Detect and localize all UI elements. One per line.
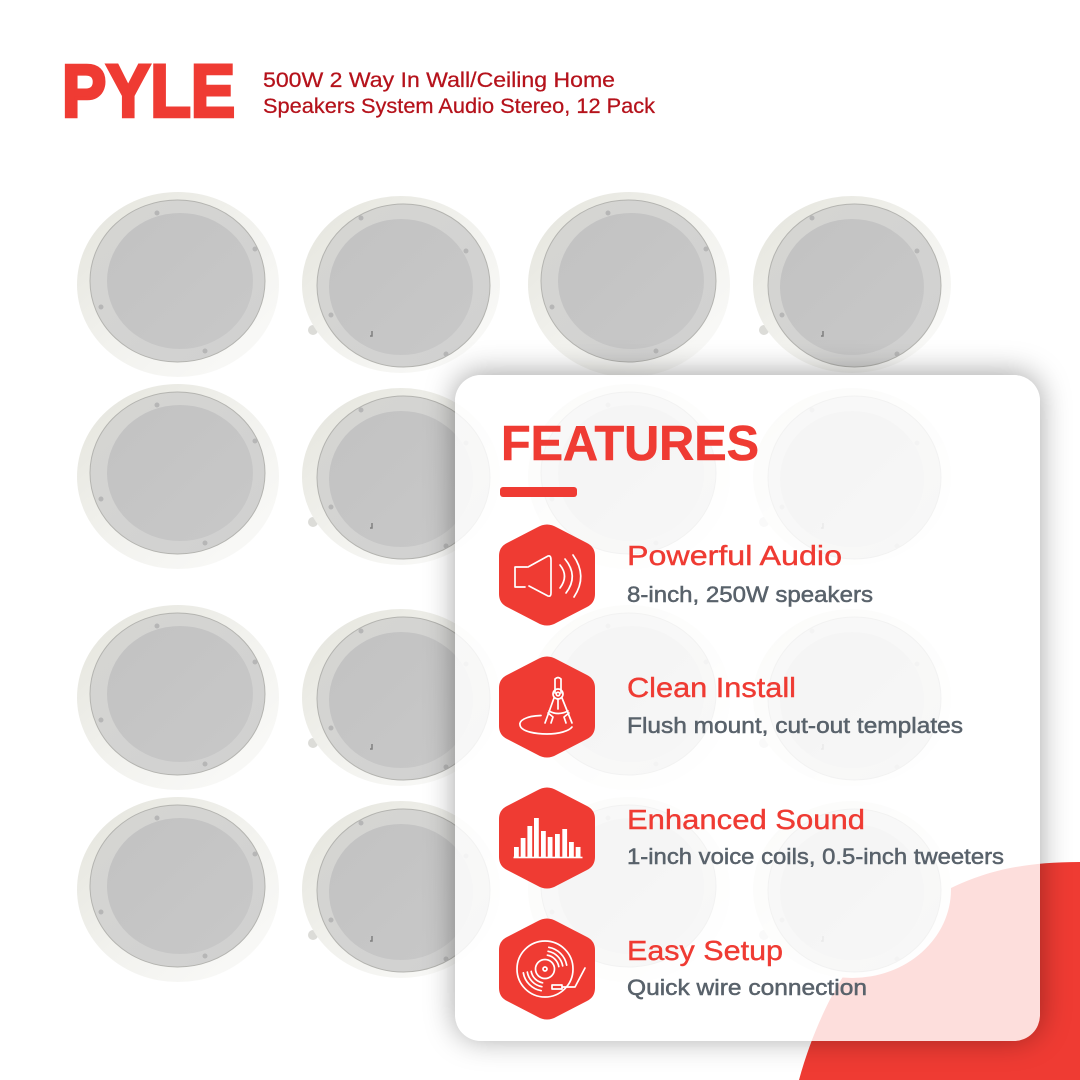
text: Easy Setup: Quick wire connection [627,975,867,1000]
text: Clean Install: Clean Install [627,672,796,703]
text: Enhanced Sound: 1-inch voice coils, 0.5-inch tweeters [627,844,1004,869]
feature: Enhanced Sound [499,788,1004,888]
text: Easy Setup [627,935,867,1000]
feature: Powerful Audio [499,524,873,626]
text: Easy Setup: Easy Setup [627,935,783,966]
text: Clean Install: Flush mount, cut-out templates [627,713,963,738]
speaker row 4 [77,797,951,982]
heading underline [500,487,577,497]
text: Powerful Audio: 8-inch, 250W speakers [627,582,873,607]
text: Powerful Audio [627,540,873,607]
speaker row 1 [77,192,951,377]
speaker row 2 [77,384,951,569]
icon: speaker [499,524,595,626]
text: Powerful Audio: Powerful Audio [627,540,842,571]
icon: equalizer bars [499,788,595,888]
text: Clean Install [627,672,963,738]
header title [263,69,656,118]
logo: PYLE: PYLE [62,50,235,132]
feature: Easy Setup [499,918,867,1020]
red corner shape [799,862,1080,1080]
header title: Speakers System Audio Stereo, 12 Pack [263,95,656,118]
feature: Clean Install [499,656,963,758]
text: Enhanced Sound: Enhanced Sound [627,804,865,835]
text: Enhanced Sound [627,804,1004,869]
header title: 500W 2 Way In Wall/Ceiling Home [263,69,615,92]
panel: features background [455,375,1040,1041]
heading: FEATURES: FEATURES [501,417,759,471]
icon: turntable record [499,918,595,1020]
speaker row 3 [77,605,951,790]
icon: compass [499,656,595,758]
